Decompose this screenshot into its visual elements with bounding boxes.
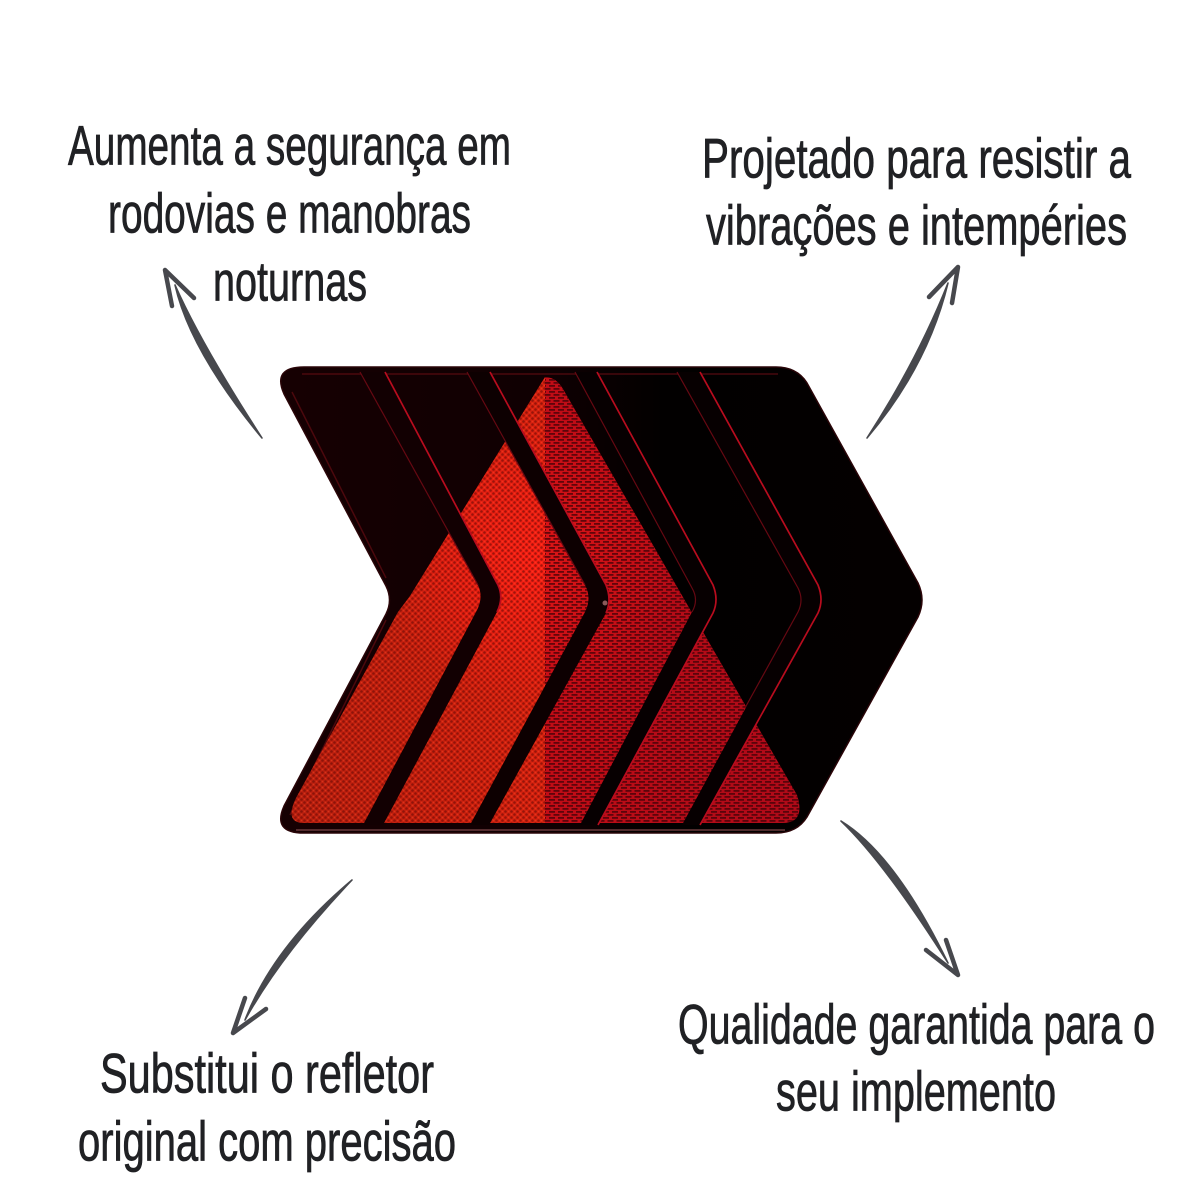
dark chevron band 3 bbox=[575, 372, 716, 825]
arrow: top right bbox=[867, 267, 958, 438]
text: precise replacement benefit bbox=[78, 1042, 456, 1172]
text: road safety benefit: Aumenta a segurança em bbox=[68, 114, 511, 176]
arrow: bottom right bbox=[841, 821, 958, 975]
text: quality benefit bbox=[678, 992, 1155, 1122]
left reflective area bbox=[280, 370, 545, 830]
infographic canvas bbox=[68, 126, 1154, 1172]
product: chevron reflector bbox=[280, 367, 922, 833]
bottom rim highlight bbox=[296, 829, 785, 831]
reflector body bbox=[281, 367, 922, 833]
dark chevron band 4 bbox=[677, 372, 821, 825]
right reflective area bbox=[545, 370, 815, 830]
text: precise replacement benefit: Substitui o refletor bbox=[100, 1042, 434, 1104]
text: road safety benefit: noturnas bbox=[213, 250, 367, 312]
text: road safety benefit: rodovias e manobras bbox=[108, 182, 471, 244]
arrow: bottom left bbox=[233, 880, 352, 1033]
faint inner lines bbox=[360, 372, 801, 708]
arrow: top left bbox=[165, 270, 262, 438]
text: quality benefit: seu implemento bbox=[776, 1060, 1056, 1122]
inner rim highlight bbox=[290, 374, 778, 815]
text: road safety benefit bbox=[68, 114, 511, 312]
dark chevron band 2 bbox=[467, 372, 609, 825]
text: precise replacement benefit: original com precisão bbox=[78, 1110, 456, 1172]
text: durability benefit bbox=[702, 126, 1132, 256]
dark chevron band 1 bbox=[360, 372, 501, 825]
red edge lines bbox=[385, 372, 821, 825]
center rivet bbox=[602, 600, 608, 606]
